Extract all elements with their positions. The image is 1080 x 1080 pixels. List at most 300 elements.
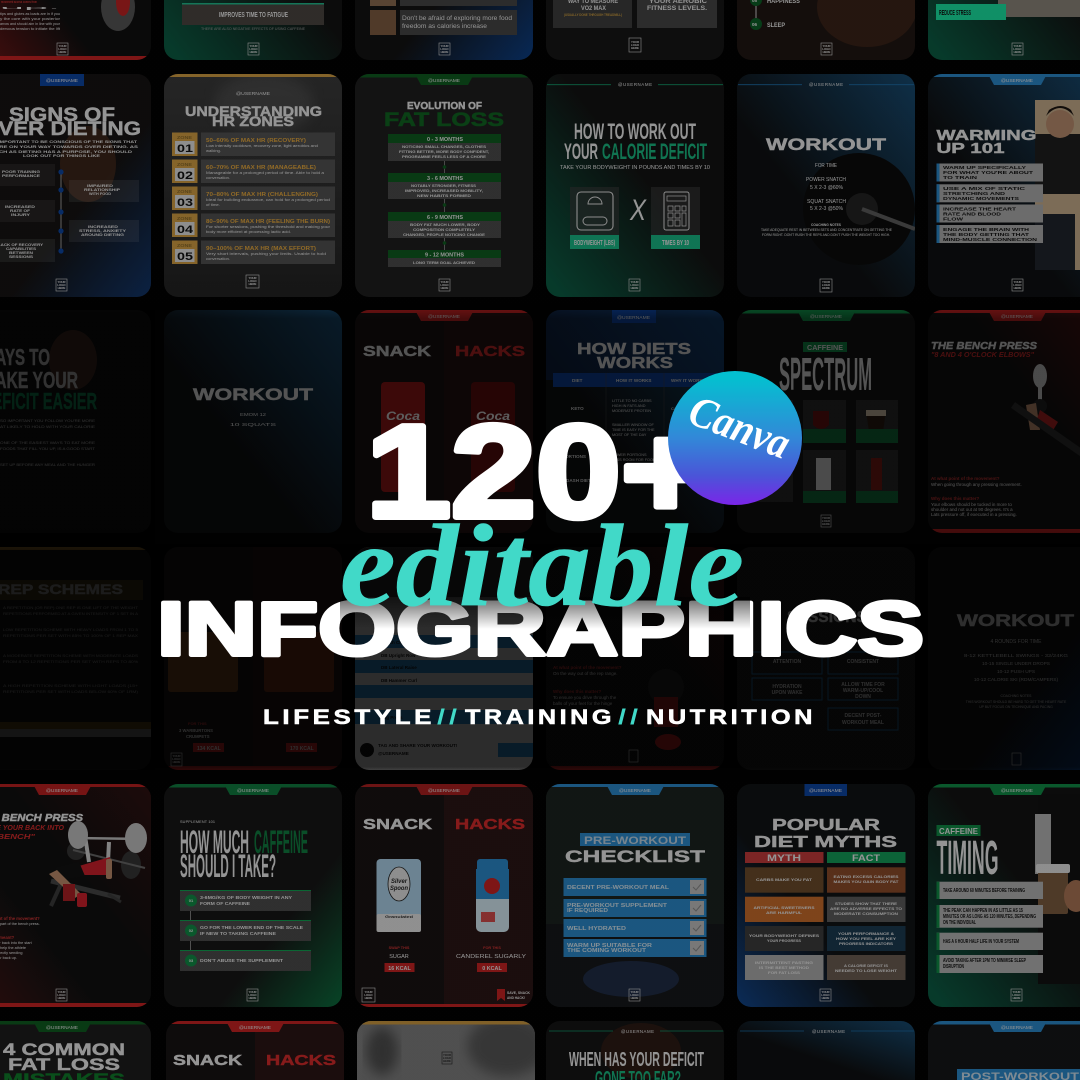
- card: blurred photo cover, cropped: YOUR: [443, 1053, 451, 1057]
- heading: editable script: editable: [340, 500, 744, 631]
- timeline stages: IMPROVED, INCREASED MOBILITY,: [405, 189, 483, 193]
- card: workout, dim: WORKOUT: [193, 385, 314, 404]
- card: movement figure red: balls of your feet for the hinge: [553, 701, 613, 706]
- card: snack hacks cola: @USERNAME: [428, 314, 460, 319]
- tips list: THE BODY GETTING THAT: [943, 232, 1029, 238]
- card: signs of over dieting: LOOK OUT FOR THINGS LIKE: [23, 153, 100, 158]
- card: calorie deficit: TAKE YOUR BODYWEIGHT IN POUNDS AND TIMES BY 10: [560, 165, 710, 171]
- card: snack hacks sugar: @USERNAME: [428, 788, 460, 793]
- card: ways to make your deficit easier: [0, 330, 97, 466]
- product: sugar bag: Spoon: [390, 885, 408, 892]
- card: caffeine spectrum: [737, 310, 915, 533]
- title: [186, 106, 322, 126]
- myth and fact grid: INTERMITTENT FASTING: [755, 960, 813, 965]
- card: caffeine spectrum: LOGO: [822, 519, 831, 523]
- card: pre-workout checklist: LOGO: [630, 993, 639, 997]
- steps: DON'T ABUSE THE SUPPLEMENT: [200, 958, 283, 963]
- card: movement figure red: [546, 547, 724, 770]
- card: how much caffeine: CAFFEINE: [254, 824, 308, 860]
- title: WORKOUT: [766, 135, 887, 154]
- card: bench press back into bench: LOGO: [57, 993, 66, 997]
- comparison table: PORTIONS: [562, 454, 586, 459]
- card: reduce stress, cropped: REDUCE STRESS: [939, 10, 971, 17]
- comparison table: DIET: [572, 378, 583, 383]
- workout details: 5 X 2-3 @60%: [810, 185, 844, 191]
- title: WHEN HAS YOUR DEFICIT: [569, 1049, 704, 1071]
- timeline: BETWEEN: [9, 251, 33, 255]
- title: WARMING: [936, 127, 1036, 144]
- card: reduce stress, cropped: YOUR: [1013, 44, 1022, 48]
- card: evolution of fat loss: [355, 74, 533, 297]
- card: food freedom tip, cropped: HERE: [441, 50, 449, 54]
- timeline: STRESS, ANXIETY: [79, 229, 127, 233]
- tips list: MIND-MUSCLE CONNECTION: [943, 237, 1038, 243]
- card row 4: [0, 547, 1080, 770]
- tips list: FLOW: [943, 216, 964, 222]
- card: snack hacks sugar: HERE: [365, 996, 373, 1000]
- card: blurred photo cover, cropped: HERE: [443, 1059, 451, 1063]
- card: rep schemes: [0, 547, 151, 770]
- table rows: 4: [470, 715, 473, 720]
- card: how much caffeine: LOGO: [248, 993, 257, 997]
- comparison table: CALORIE DEFICIT: [671, 406, 706, 411]
- zone 02: [172, 160, 335, 183]
- product: sugar bag: [376, 859, 421, 932]
- title: [0, 107, 140, 136]
- swap labels: FOR THIS: [483, 946, 501, 950]
- card: post-workout, cropped: [928, 1021, 1080, 1080]
- title: PRE-WORKOUT: [584, 835, 686, 847]
- title: HOW DIETS: [577, 341, 691, 358]
- card: popular diet myths: LOGO: [821, 993, 830, 997]
- workout details: TAKE ADEQUATE REST IN BETWEEN SETS AND CONCENTRATE ON GETTING THE: [761, 228, 893, 232]
- heading: INFOGRAPHICS: INFOGRAPHICS: [157, 587, 924, 672]
- title: WORKOUT: [957, 611, 1075, 630]
- checklist boxes: ALLOW TIME FOR: [841, 682, 885, 688]
- timeline stages: NOTICING SMALL CHANGES, CLOTHES: [402, 145, 487, 149]
- swap labels: 16 KCAL: [388, 966, 411, 972]
- card: how diets works: [546, 310, 724, 533]
- card: warming up 101: LOGO: [1013, 283, 1022, 287]
- card row 3: [0, 310, 1080, 533]
- card: blue photo cover, cropped: [737, 1021, 915, 1080]
- title band: REP SCHEMES: [0, 581, 123, 597]
- notes: Lats pressure off, if executed in a pressing.: [931, 512, 1017, 517]
- timeline stages: FITTING BETTER, MORE BODY CONFIDENT,: [399, 150, 489, 154]
- title: HACKS: [266, 1052, 336, 1069]
- card: signs of over dieting: [0, 74, 151, 297]
- share footer: TAG AND SHARE YOUR WORKOUT!: [378, 743, 458, 748]
- card: ways to make your deficit easier: SET UP BEFORE ANY MEAL AND THE HUNGER: [0, 462, 95, 467]
- title: [779, 342, 872, 400]
- title: CAFFEINE: [939, 826, 978, 836]
- tips list: RATE AND BLOOD: [943, 212, 1002, 218]
- myth and fact grid: FOR FAT LOSS: [768, 970, 800, 975]
- workout details: 4 ROUNDS FOR TIME: [990, 639, 1042, 645]
- card: movement figure red: Why does this matter?: [553, 689, 602, 694]
- card: food freedom tip, cropped: YOUR: [440, 44, 449, 48]
- steps: 3-6MG/KG OF BODY WEIGHT IN ANY: [200, 895, 292, 900]
- card: workout power snatch: @USERNAME: [809, 82, 843, 87]
- tagline: lifestyle training nutrition: [263, 705, 816, 729]
- steps: 02: [189, 928, 194, 933]
- card: caffeine timing: [928, 784, 1080, 1007]
- title: 4 COMMON: [3, 1040, 125, 1059]
- card: rep schemes: LOW REPETITION SCHEME WITH HEAVY LOADS FROM 1 TO 5: [3, 627, 139, 632]
- card: calorie deficit: YOUR: [630, 280, 639, 284]
- table rows: DB Upright Row: [381, 653, 416, 658]
- card: blurred photo cover, cropped: LOGO: [443, 1056, 452, 1060]
- zone 05: 90–100% OF MAX HR (MAX EFFORT): [206, 246, 316, 252]
- card: snack hacks crumpets: 170 KCAL: [290, 746, 314, 752]
- photo: athlete: [1035, 100, 1080, 270]
- timeline stages: 0 - 3 MONTHS: [427, 137, 464, 143]
- title: UNDERSTANDING: [185, 103, 322, 119]
- card: workout rounds for time: [928, 547, 1080, 770]
- card: bench press elbows: @USERNAME: [1001, 314, 1033, 319]
- card: evolution of fat loss: YOUR: [440, 280, 449, 284]
- card: workout power snatch: HERE: [822, 286, 830, 290]
- product: sweetener bottle: [476, 859, 509, 932]
- illustration: lifter on bench: [49, 821, 147, 907]
- zone 04: [172, 214, 335, 237]
- notes: [0, 916, 40, 960]
- card: bench press elbows: [928, 310, 1080, 533]
- myth and fact grid: NEEDED TO LOSE WEIGHT: [835, 968, 898, 973]
- notes: Your elbows should be tucked in more to: [931, 502, 1012, 507]
- card: food freedom tip, cropped: freedom as calories increase: [402, 23, 487, 30]
- card: caffeine spectrum: YOUR: [822, 516, 830, 520]
- timeline stages: CHANGED, PEOPLE NOTICING CHANGE: [403, 233, 486, 237]
- table rows: [355, 635, 533, 724]
- table rows: Bench Close Grip: [381, 640, 419, 645]
- tips list: FOR WHAT YOU'RE ABOUT: [943, 170, 1033, 176]
- card: improves time to fatigue, cropped: THERE ARE ALSO NEGATIVE EFFECTS OF USING CAFFEINE: [201, 27, 306, 31]
- table rows: DB Lateral Raise: [381, 665, 417, 670]
- workout details: FORM RIGHT. DON'T RUSH THE REPS AND DON'T PUSH THE WEIGHT TOO HIGH.: [762, 233, 890, 237]
- tips list: THE PEAK CAN HAPPEN IN AS LITTLE AS 15: [943, 908, 1023, 914]
- swap labels: 0 KCAL: [482, 966, 502, 972]
- zone 03: of time.: [206, 202, 220, 207]
- timeline: INCREASED: [88, 225, 118, 229]
- title: SIGNS OF: [9, 105, 115, 126]
- zone 05: ZONE: [177, 243, 192, 248]
- steps: IF NEW TO TAKING CAFFEINE: [200, 931, 276, 936]
- card: reduce stress, cropped: HERE: [1014, 50, 1022, 54]
- myth and fact grid: IS THE BEST METHOD: [759, 965, 809, 970]
- card: post-workout, cropped: @USERNAME: [1001, 1025, 1033, 1030]
- tips list: WARM UP SPECIFICALLY: [943, 165, 1027, 171]
- card: reduce stress, cropped: [928, 0, 1080, 60]
- workout details: POWER SNATCH: [806, 177, 846, 183]
- tagline: lifestyle training nutrition: NUTRITION: [646, 705, 816, 729]
- card: rep schemes: FROM 8 TO 12 REPETITIONS PER SET WITH REPS TO 80%: [3, 659, 139, 664]
- card: rep schemes: A HIGH REPETITION SCHEME WITH LIGHT LOADS (15+: [3, 683, 139, 688]
- card: bench press notes, cropped: dervous tension to initiate the lift: [0, 27, 60, 31]
- title: UP 101: [936, 140, 1004, 157]
- myth and fact grid: ARE HARMFUL: [766, 910, 803, 915]
- card: VO2 max, cropped: FITNESS LEVELS.: [647, 5, 707, 12]
- title: YOUR: [564, 139, 598, 164]
- card: food freedom tip, cropped: Don't be afraid of exploring more food: [402, 15, 512, 22]
- tips list: [936, 882, 1043, 973]
- zone 02: 60–70% OF MAX HR (MANAGEABLE): [206, 165, 316, 171]
- card: workout exercise table: [355, 547, 533, 770]
- title: [957, 1069, 1080, 1080]
- tagline: lifestyle training nutrition: //: [618, 705, 642, 729]
- card: happiness and sleep list, cropped: YOUR: [822, 44, 831, 48]
- title: [385, 102, 504, 126]
- card: snack hacks sugar: [355, 784, 533, 1007]
- checklist items: WELL HYDRATED: [567, 926, 626, 932]
- card: snack hacks crumpets: 3 WARBURTONS: [179, 728, 213, 733]
- timeline: RELATIONSHIP: [84, 188, 121, 192]
- comparison table: MODERATE PROTEIN: [612, 409, 651, 413]
- tips list: DYNAMIC MOVEMENTS: [943, 196, 1020, 202]
- drink tiles: [750, 400, 898, 503]
- comparison table: INTERMITTENT: [556, 430, 590, 435]
- card: snack hacks crumpets: 134 KCAL: [197, 746, 221, 752]
- tips list: DISRUPTION: [943, 964, 964, 970]
- card: workout, dim: 10 SQUATS: [230, 422, 276, 427]
- card: bench press notes, cropped: y the core with your posterior: [0, 17, 61, 21]
- card: workout power snatch: LOGO: [822, 283, 831, 287]
- card: happiness and sleep list, cropped: 06: [752, 22, 758, 27]
- card: bench press back into bench: @USERNAME: [46, 788, 78, 793]
- card: rep schemes: A MODERATE REPETITION SCHEME WITH MODERATE LOADS: [3, 653, 138, 658]
- card: calorie deficit: HERE: [631, 286, 639, 290]
- card: snack hacks, cropped: [166, 1021, 344, 1080]
- icon: calculator panel: [651, 187, 700, 249]
- card: snack hacks crumpets: FOR THIS: [188, 721, 207, 726]
- card: VO2 max, cropped: HERE: [631, 46, 639, 50]
- title: HACKS: [455, 343, 525, 360]
- card: how much caffeine: YOUR: [248, 990, 257, 994]
- checklist boxes: DECENT POST-: [845, 713, 882, 719]
- card: snack hacks crumpets: LOGO: [172, 757, 181, 761]
- myth and fact grid: MAKES YOU GAIN BODY FAT: [834, 879, 899, 884]
- zone 01: ZONE: [177, 135, 192, 140]
- card: caffeine timing: LOGO: [1012, 993, 1021, 997]
- comparison table: WHY IT WORKS: [671, 378, 706, 383]
- card: rep schemes: A REPETITION (OR REP) ONE REP IS ONE LIFT OF THE WEIGHT: [3, 605, 139, 610]
- tips list: AVOID TAKING AFTER 1PM TO MINIMISE SLEEP: [943, 958, 1026, 964]
- card: calorie deficit: @USERNAME: [618, 82, 652, 87]
- title: HOW TO WORK OUT: [574, 119, 696, 144]
- tagline: lifestyle training nutrition: LIFESTYLE: [263, 705, 435, 729]
- card: when has your deficit gone too far: [546, 1021, 724, 1080]
- workout details: COACHING NOTES: [811, 223, 842, 227]
- workout details: FOR TIME: [815, 163, 838, 169]
- card: snack hacks crumpets: CRUMPETS: [186, 734, 210, 739]
- card: evolution of fat loss: HERE: [441, 286, 449, 290]
- card: how much caffeine: HERE: [249, 996, 257, 1000]
- myth and fact grid: [745, 852, 906, 980]
- tips list: STRETCHING AND: [943, 191, 1006, 197]
- card: signs of over dieting: YOUR: [57, 280, 66, 284]
- card: bench press back into bench: YOUR: [57, 990, 66, 994]
- timeline: RATE OF: [10, 209, 31, 213]
- title: DIET MYTHS: [754, 834, 897, 851]
- comparison table: HOW IT WORKS: [616, 378, 651, 383]
- tagline: lifestyle training nutrition: //: [437, 705, 461, 729]
- zone 05: Very short intervals, pushing your limits. Unable to hold: [206, 251, 326, 256]
- card: improves time to fatigue, cropped: LOGO: [249, 47, 258, 51]
- timeline: CAPABILITIES: [6, 247, 37, 251]
- card: rep schemes: REPETITIONS PER SET WITH LOADS BELOW 60% OF 1RM): [3, 689, 139, 694]
- badge: Canva logo: [668, 371, 802, 505]
- card: bench press notes, cropped: tips and glutes as loads are in if you: [0, 12, 60, 16]
- zone 01: 50–60% OF MAX HR (RECOVERY): [206, 138, 306, 144]
- myth and fact grid: PROGRESS INDICATORS: [839, 941, 893, 946]
- myth and fact grid: ARTIFICIAL SWEETENERS: [754, 905, 815, 910]
- comparison table: FEWER PORTIONS: [612, 453, 647, 457]
- product: sugar bag: Silver: [391, 878, 407, 885]
- myth and fact grid: YOUR BODYWEIGHT DEFINES: [749, 933, 819, 938]
- tips list: [936, 164, 1043, 243]
- card: caffeine timing: @USERNAME: [1001, 788, 1033, 793]
- card: improves time to fatigue, cropped: IMPROVES TIME TO FATIGUE: [219, 12, 288, 19]
- card: bench press notes, cropped: movement access comes from: [1, 0, 37, 4]
- myth and fact grid: MODERATE CONSUMPTION: [834, 911, 898, 916]
- card: improves time to fatigue, cropped: HERE: [250, 50, 258, 54]
- title: CALORIE DEFICIT: [602, 139, 707, 164]
- title: POPULAR: [772, 817, 881, 834]
- swap labels: [384, 946, 526, 972]
- workout details: [964, 639, 1068, 709]
- card row 1: cropped training and nutrition cards: [0, 0, 1080, 60]
- tips list: ENGAGE THE BRAIN WITH: [943, 227, 1030, 233]
- zone 03: 70–80% OF MAX HR (CHALLENGING): [206, 192, 318, 198]
- card: snack hacks crumpets: HERE: [173, 760, 181, 764]
- card row 2: [0, 74, 1080, 297]
- card: bench press notes, cropped: up.: [0, 6, 60, 10]
- title: [3, 1040, 125, 1080]
- tips list: INCREASE THE HEART: [943, 206, 1016, 212]
- timeline stages: NOTABLY STRONGER, FITNESS: [411, 184, 477, 188]
- card: popular diet myths: HERE: [822, 996, 830, 1000]
- checklist boxes: DOWN: [855, 694, 871, 700]
- swap labels: SUGAR: [389, 954, 409, 960]
- icon: cola cans: Coca: [386, 409, 420, 423]
- timeline stages: [388, 134, 501, 267]
- card: signs of over dieting: HERE: [58, 286, 66, 290]
- title: [363, 816, 525, 833]
- zone 01: Low intensity cooldown, recovery zone, light aerobics and: [206, 143, 318, 148]
- checklist items: IF REQUIRED: [567, 908, 608, 914]
- card: ways to make your deficit easier: SO IMPORTANT YOU FOLLOW YOU'RE MORE: [0, 418, 95, 423]
- title: SNACK: [173, 1052, 242, 1069]
- workout details: 10-12 CALORIE SKI (RDM/CAMPERS): [974, 677, 1059, 683]
- card: calorie deficit: LOGO: [630, 283, 639, 287]
- title: HR ZONES: [212, 113, 294, 129]
- notes: Why does this matter?: [931, 496, 980, 501]
- title: [564, 124, 707, 159]
- card: warming up 101: [928, 74, 1080, 297]
- workout details: SQUAT SNATCH: [807, 199, 846, 205]
- title: [363, 346, 524, 356]
- notes: shoulder and not out at 90 degrees. It's a: [931, 507, 1013, 512]
- card: post workout sessions: [737, 547, 915, 770]
- card: workout power snatch: YOUR: [822, 280, 830, 284]
- share footer: @USERNAME: [378, 751, 409, 756]
- card: VO2 max, cropped: YOUR: [631, 40, 639, 44]
- zone 03: Ideal for building endurance, can hold for a prolonged period: [206, 197, 330, 202]
- myth and fact grid: HOW YOU FEEL ARE KEY: [836, 936, 896, 941]
- title: "8 AND 4 O'CLOCK ELBOWS": [931, 352, 1035, 359]
- workout details: UP BUT FOCUS ON TECHNIQUE AND PACING: [979, 705, 1053, 709]
- notes: When going through any pressing movement.: [931, 482, 1022, 487]
- card: post workout sessions: SESSIONS: [787, 609, 867, 626]
- card: improves time to fatigue, cropped: YOUR: [249, 44, 258, 48]
- card: bench press notes, cropped: arrow and should aim in line with your: [0, 22, 61, 26]
- card: rep schemes: REPETITIONS PERFORMED AT A GIVEN INTENSITY OF 1 SET IN A: [3, 611, 138, 616]
- title: HACKS: [455, 816, 525, 833]
- zone 05: conversation.: [206, 256, 230, 261]
- title: EVOLUTION OF: [407, 101, 482, 112]
- title: [936, 130, 1036, 154]
- card: blurred photo cover, cropped: [357, 1016, 547, 1080]
- myth and fact grid: CARBS MAKE YOU FAT: [756, 877, 813, 882]
- card: how much caffeine: @USERNAME: [237, 788, 269, 793]
- title: SNACK: [363, 816, 432, 833]
- card: snack hacks, cropped: @USERNAME: [239, 1025, 271, 1030]
- card: bench press notes, cropped: YOUR: [58, 44, 67, 48]
- title: WORKS: [597, 355, 673, 372]
- card: workout, dim: EMOM 12: [240, 412, 267, 417]
- zone 02: 02: [177, 170, 193, 182]
- title: THE BENCH PRESS: [931, 341, 1037, 352]
- title: CAFFEINE: [807, 343, 843, 352]
- card: popular diet myths: [737, 784, 915, 1007]
- zone 05: 05: [177, 251, 193, 263]
- timeline stages: 9 - 12 MONTHS: [425, 252, 465, 258]
- steps: [180, 890, 311, 971]
- card: pre-workout checklist: HERE: [631, 996, 639, 1000]
- icon: save bookmark: SAVE, SNACK: [507, 990, 530, 995]
- card: understanding HR zones: @USERNAME: [236, 91, 270, 96]
- product: sugar bag: Granulated: [385, 914, 414, 919]
- myth and fact grid: FACT: [852, 853, 881, 863]
- checklist boxes: UPON WAKE: [772, 690, 803, 696]
- timeline stages: BODY FAT MUCH LOWER, BODY: [410, 223, 481, 227]
- table rows: DB Hammer Curl: [381, 678, 417, 683]
- card: how much caffeine: SHOULD I TAKE?: [180, 848, 276, 884]
- zone 01: 01: [177, 143, 193, 155]
- card: ways to make your deficit easier: FOODS THAT FILL YOU UP, IS A GOOD START: [0, 446, 96, 451]
- checklist boxes: ATTENTION: [773, 659, 802, 665]
- zone 04: ZONE: [177, 216, 192, 221]
- zone 04: 04: [177, 224, 194, 236]
- icon: calculator panel: TIMES BY 10: [662, 240, 689, 247]
- tagline: lifestyle training nutrition: TRAINING: [465, 705, 615, 729]
- timeline stages: COMPOSITION COMPLETELY: [413, 228, 476, 232]
- timeline stages: 3 - 6 MONTHS: [427, 176, 464, 182]
- notes: [931, 476, 1022, 517]
- title: [0, 348, 97, 410]
- card: improves time to fatigue, cropped: [164, 0, 342, 60]
- table rows: 220: [515, 715, 523, 720]
- card: happiness and sleep list, cropped: SLEEP: [767, 22, 786, 29]
- zone 02: conversation.: [206, 175, 230, 180]
- steps: 01: [189, 898, 194, 903]
- notes: At what point of the movement?: [931, 476, 1000, 481]
- title: HOW MUCH: [180, 824, 249, 860]
- card: warming up 101: YOUR: [1013, 280, 1022, 284]
- card: movement figure red: To ensure you drive through the: [553, 695, 617, 700]
- multiply sign: X: [629, 194, 647, 227]
- checklist boxes: CONSISTENT: [847, 659, 879, 665]
